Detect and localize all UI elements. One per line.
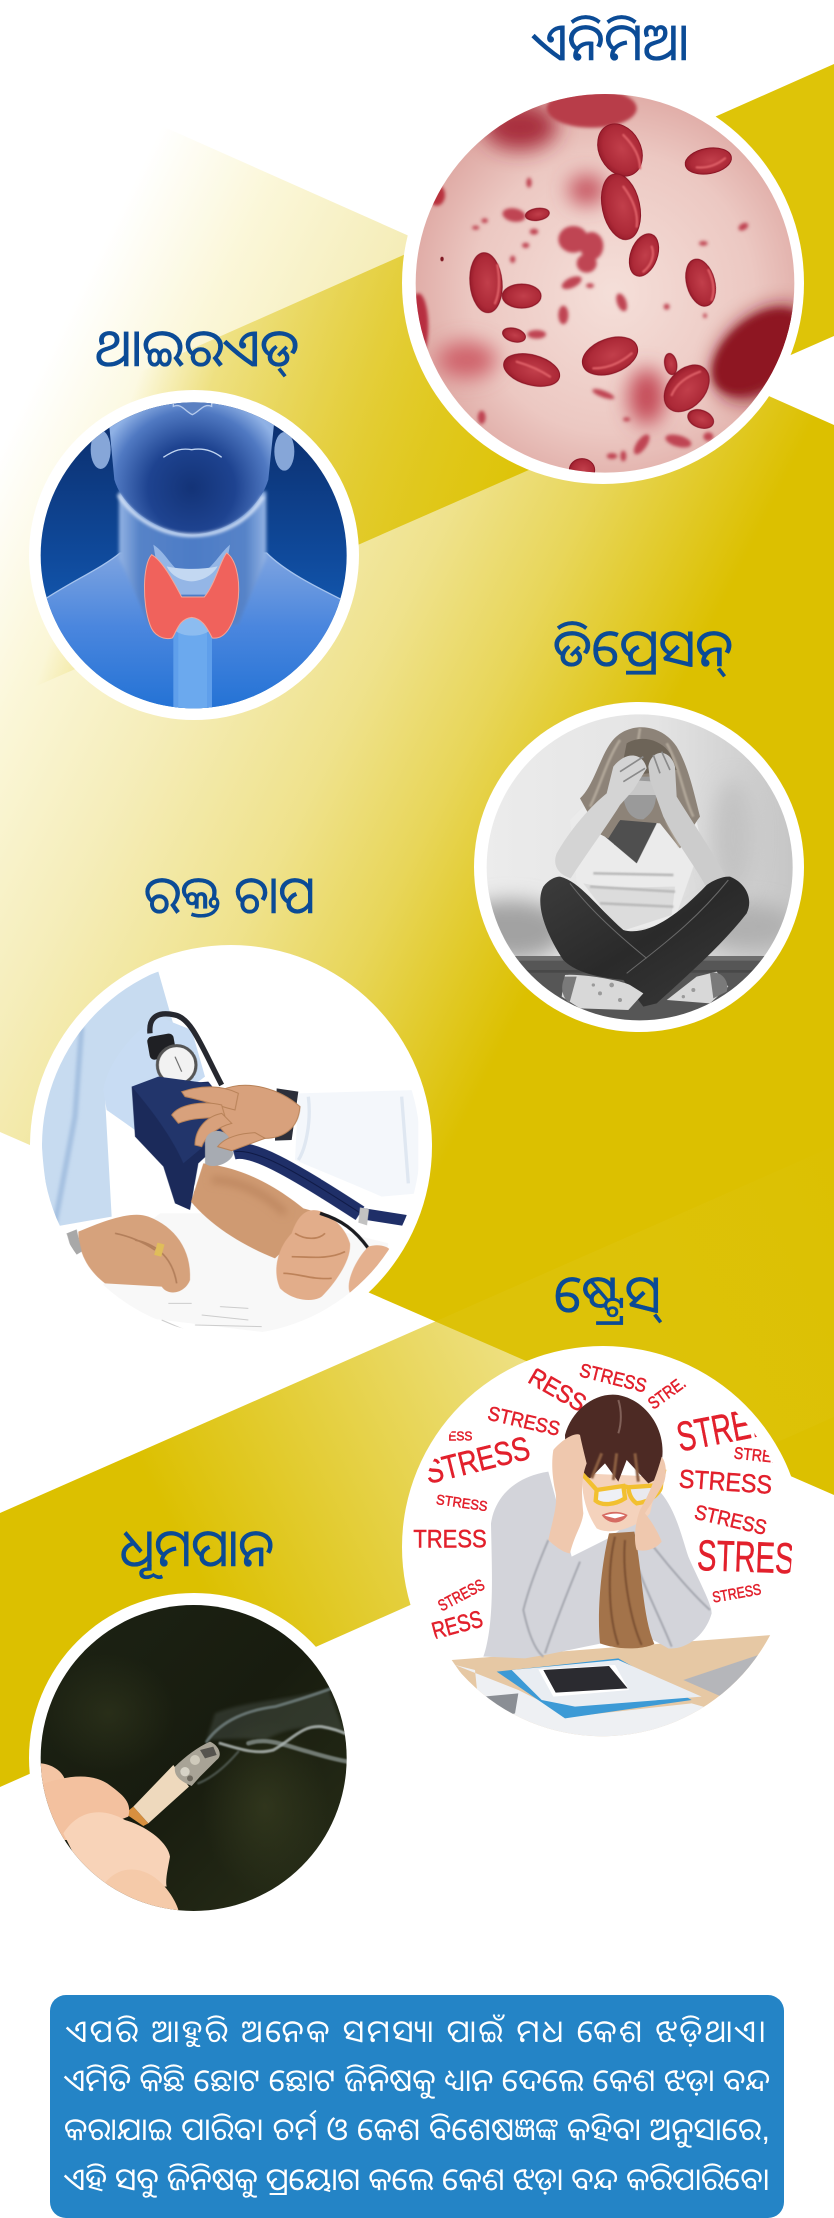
stress words: RESS [524, 1363, 591, 1418]
photo: blood pressure check [30, 945, 435, 1350]
heading: smoking: ଧୂମପାନ [120, 1520, 274, 1579]
stress words [413, 1360, 795, 1645]
desk [452, 1635, 772, 1737]
background: yellow gradient bands [0, 54, 834, 1787]
stress words: STRESS [435, 1491, 489, 1514]
stress words: STRESS [436, 1577, 488, 1615]
face [582, 1473, 658, 1531]
sweater [483, 1472, 712, 1658]
fingers [40, 1763, 64, 1785]
photo: depressed woman sitting [453, 702, 804, 1032]
text line 3: କରାଯାଇ ପାରିବ। ଚର୍ମ ଓ କେଶ ବିଶେଷଜ୍ଞଙ୍କ କହିବା ଅନୁସାରେ, [64, 2109, 770, 2148]
stress words: STRE. [673, 1399, 762, 1461]
stress words: ESS [448, 1429, 472, 1444]
heading: depression: ଡିପ୍ରେସନ୍ [553, 620, 733, 678]
stress words: STRESS [577, 1360, 649, 1397]
photo: hand with lit cigarette [29, 1593, 359, 1923]
stress words: STRE. [644, 1373, 689, 1413]
stress words: STRESS [678, 1463, 773, 1500]
stress words: STRESS [486, 1403, 562, 1441]
hair top [565, 1395, 663, 1483]
stress words: STRESS [421, 1430, 534, 1492]
stress words: RESS [429, 1606, 486, 1645]
heading: stress: ଷ୍ଟ୍ରେସ୍ [554, 1266, 662, 1325]
stress words: STRE. [733, 1443, 776, 1467]
smoke [198, 1688, 348, 1783]
text line 4: ଏହି ସବୁ ଜିନିଷକୁ ପ୍ରୟୋଗ କଲେ କେଶ ଝଡ଼ା ବନ୍ଦ କରିପାରିବେ। [63, 2162, 770, 2198]
text line 2: ଏମିତି କିଛି ଛୋଟ ଛୋଟ ଜିନିଷକୁ ଧ୍ୟାନ ଦେଲେ କେଶ ଝଡ଼ା ବନ୍ଦ [63, 2063, 770, 2099]
photo: blood cells [402, 82, 830, 484]
photo: thyroid gland in neck [29, 390, 359, 720]
stress words: STRESS [711, 1581, 763, 1607]
heading: blood pressure: ରକ୍ତ ଚାପ [144, 867, 315, 925]
heading: thyroid: ଥାଇରଏଡ୍ [95, 320, 299, 378]
text panel [50, 1995, 784, 2218]
stress words: STRESS [692, 1501, 769, 1540]
hair [599, 1532, 654, 1648]
stress words: TRESS [413, 1525, 487, 1553]
heading: anemia: ଏନିମିଆ [531, 14, 689, 72]
text line 1: ଏପରି ଆହୁରି ଅନେକ ସମସ୍ୟା ପାଇଁ ମଧ କେଶ ଝଡ଼ିଥାଏ। [65, 2014, 766, 2049]
hands [548, 1434, 587, 1553]
cigarette [133, 1765, 189, 1823]
glasses [598, 1488, 623, 1502]
photo: stressed woman with STRESS words [402, 1346, 804, 1748]
